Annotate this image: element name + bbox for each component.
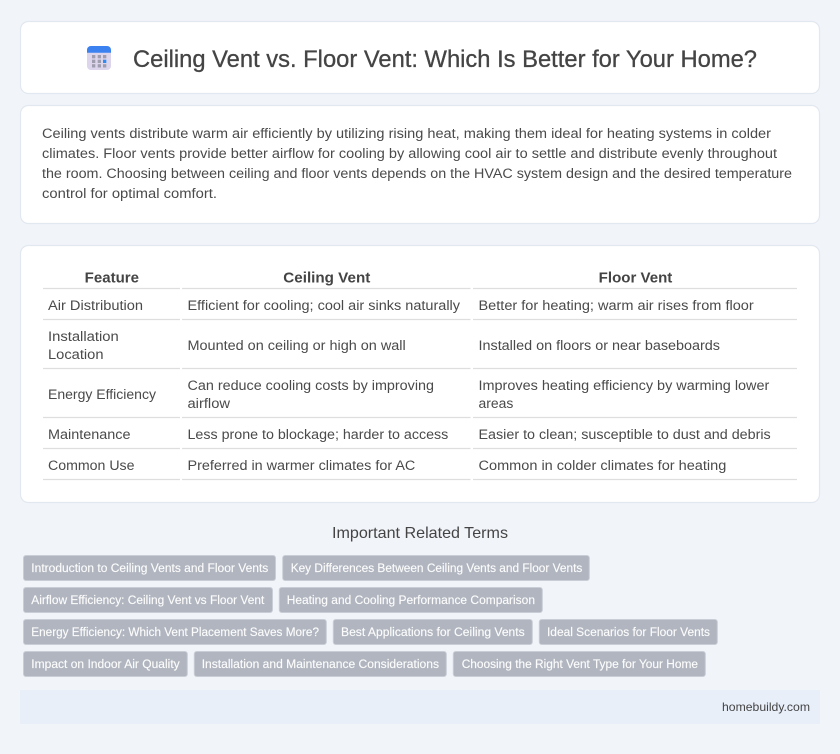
row: installation location: Installed on floors or near baseboards	[478, 338, 720, 354]
row: common use: Preferred in warmer climates for AC	[188, 458, 415, 474]
row: maintenance: Maintenance	[48, 427, 131, 443]
tag: energy efficiency: Energy Efficiency: Which Vent Placement Saves More?	[31, 625, 319, 639]
intro paragraph: Ceiling vents distribute warm air efficiently by utilizing rising heat, making them ideal for heating systems in colder	[42, 126, 771, 142]
intro paragraph	[42, 126, 792, 202]
footer source: homebuildy.com	[722, 700, 810, 714]
tag: airflow efficiency: Airflow Efficiency: Ceiling Vent vs Floor Vent	[31, 593, 265, 607]
panel: introduction text	[20, 106, 820, 224]
tag: key differences	[283, 556, 589, 580]
tag: ideal scenarios: Ideal Scenarios for Floor Vents	[547, 625, 710, 639]
related term tags	[24, 556, 717, 676]
tag: introduction	[24, 556, 276, 580]
row: air distribution: Air Distribution	[48, 298, 143, 314]
tag: installation and maintenance	[194, 652, 446, 676]
row: energy efficiency: airflow	[188, 396, 231, 412]
row: energy efficiency: Energy Efficiency	[48, 387, 157, 403]
tag: indoor air quality	[24, 652, 187, 676]
tag: airflow efficiency	[24, 588, 272, 612]
tag: introduction: Introduction to Ceiling Vents and Floor Vents	[31, 561, 268, 575]
tag: best applications: Best Applications for Ceiling Vents	[341, 625, 525, 639]
intro paragraph: climates. Floor vents provide better airflow for cooling by allowing cool air to settle and distribute evenly throughout	[42, 146, 777, 162]
title: Ceiling Vent vs. Floor Vent: Which Is Better for Your Home?	[133, 46, 757, 73]
tag: choosing vent type: Choosing the Right Vent Type for Your Home	[462, 657, 698, 671]
tag: best applications	[333, 620, 532, 644]
tag: ideal scenarios	[539, 620, 717, 644]
tag: installation and maintenance: Installation and Maintenance Considerations	[202, 657, 439, 671]
row: energy efficiency: Improves heating efficiency by warming lower	[478, 378, 770, 394]
panel: comparison table	[20, 246, 820, 502]
intro paragraph: control for optimal comfort.	[42, 186, 217, 202]
panel: title header	[20, 22, 820, 94]
intro paragraph: the room. Choosing between ceiling and floor vents depends on the HVAC system design and the desired temperature	[42, 166, 792, 182]
row: maintenance: Easier to clean; susceptible to dust and debris	[478, 427, 771, 443]
row: air distribution: Efficient for cooling; cool air sinks naturally	[188, 298, 461, 314]
row: energy efficiency	[48, 378, 770, 412]
table header row	[85, 270, 672, 286]
row: air distribution	[48, 298, 754, 314]
tag: choosing vent type	[453, 652, 705, 676]
tag: indoor air quality: Impact on Indoor Air Quality	[31, 657, 181, 671]
row: air distribution: Better for heating; warm air rises from floor	[478, 298, 754, 314]
tag: energy efficiency	[24, 620, 326, 644]
row: energy efficiency: Can reduce cooling costs by improving	[188, 378, 434, 394]
row: installation location: Installation	[48, 329, 119, 345]
row: installation location: Location	[48, 347, 104, 363]
heading: related terms: Important Related Terms	[332, 525, 508, 542]
row: maintenance: Less prone to blockage; harder to access	[188, 427, 448, 443]
row: common use	[48, 458, 726, 474]
row: installation location: Mounted on ceiling or high on wall	[188, 338, 406, 354]
row: common use: Common Use	[48, 458, 135, 474]
row: maintenance	[48, 427, 771, 443]
tag: heating and cooling	[279, 588, 542, 612]
footer bar	[20, 690, 820, 724]
table header row: Feature	[85, 270, 139, 286]
icon: calendar grid	[87, 46, 111, 70]
row: energy efficiency: areas	[478, 396, 513, 412]
tag: heating and cooling: Heating and Cooling Performance Comparison	[287, 593, 535, 607]
table header row: Ceiling Vent	[283, 270, 370, 286]
row: installation location	[48, 329, 720, 363]
table header row: Floor Vent	[599, 270, 672, 286]
tag: key differences: Key Differences Between Ceiling Vents and Floor Vents	[291, 561, 582, 575]
row: common use: Common in colder climates for heating	[478, 458, 726, 474]
